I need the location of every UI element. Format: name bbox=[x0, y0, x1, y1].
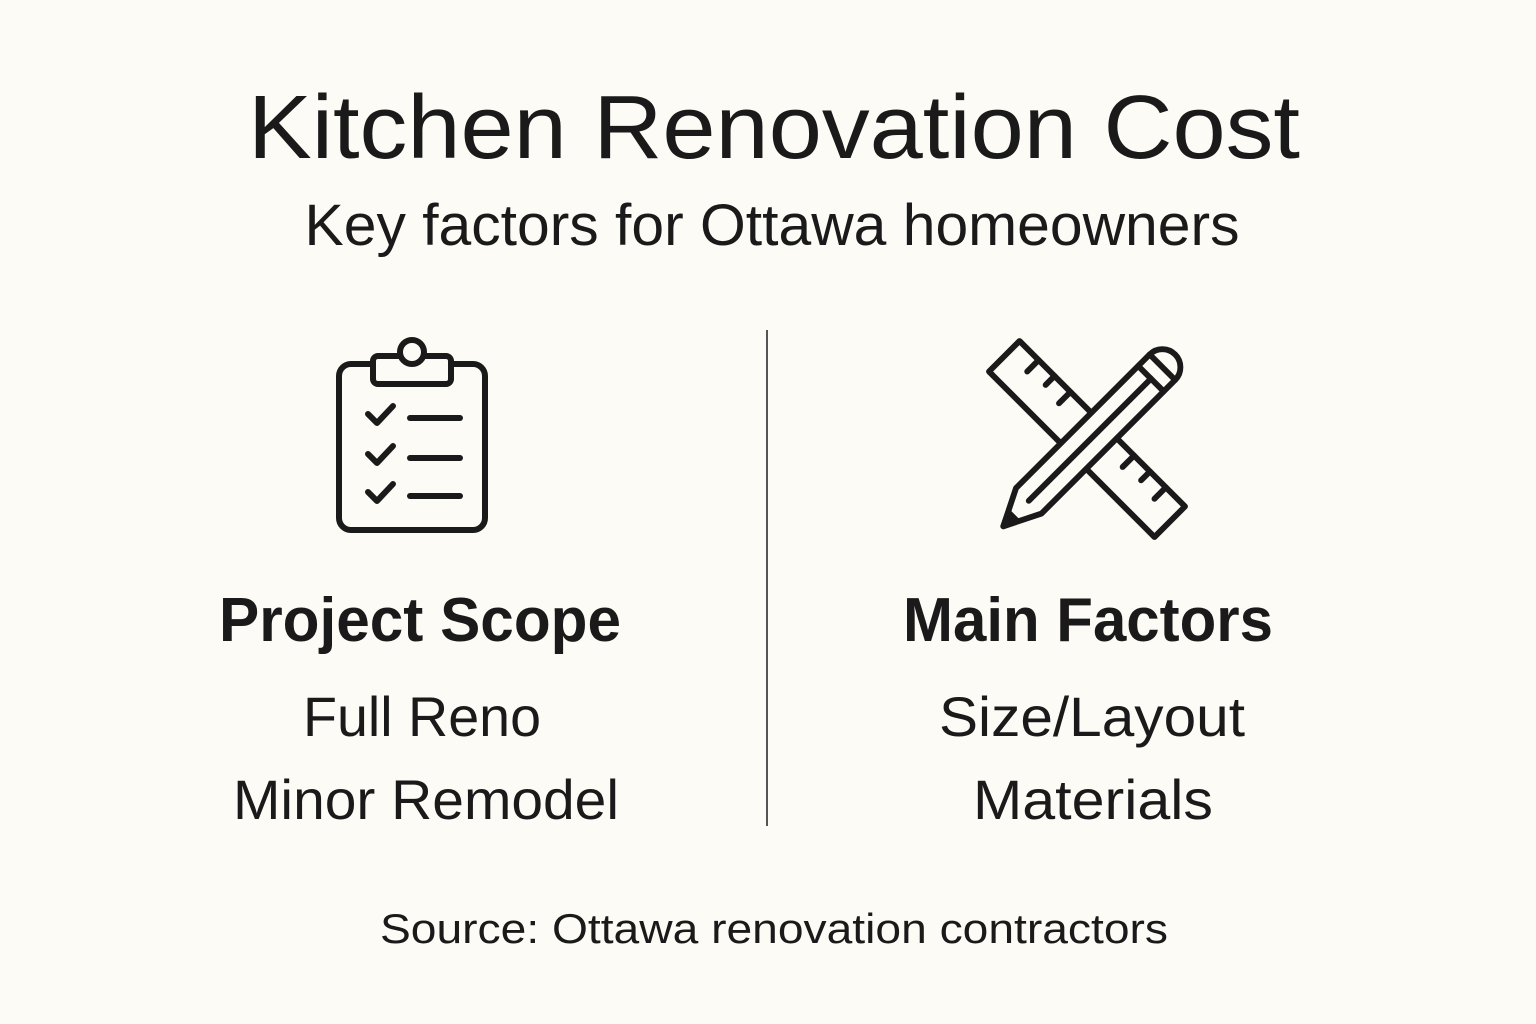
title: Kitchen Renovation Cost bbox=[248, 78, 1300, 178]
item: materials: Materials bbox=[973, 768, 1213, 831]
heading: main factors: Main Factors bbox=[903, 586, 1273, 655]
source note: Source: Ottawa renovation contractors bbox=[380, 905, 1168, 952]
icon: clipboard bbox=[339, 340, 485, 530]
heading: project scope: Project Scope bbox=[219, 586, 621, 655]
icon: ruler and pencil bbox=[989, 341, 1188, 539]
item: full reno: Full Reno bbox=[303, 685, 541, 748]
item: size/layout: Size/Layout bbox=[939, 685, 1245, 748]
subtitle: Key factors for Ottawa homeowners bbox=[304, 193, 1240, 258]
panel: project scope bbox=[219, 340, 621, 831]
panel: main factors bbox=[903, 341, 1273, 831]
item: minor remodel: Minor Remodel bbox=[233, 768, 619, 831]
